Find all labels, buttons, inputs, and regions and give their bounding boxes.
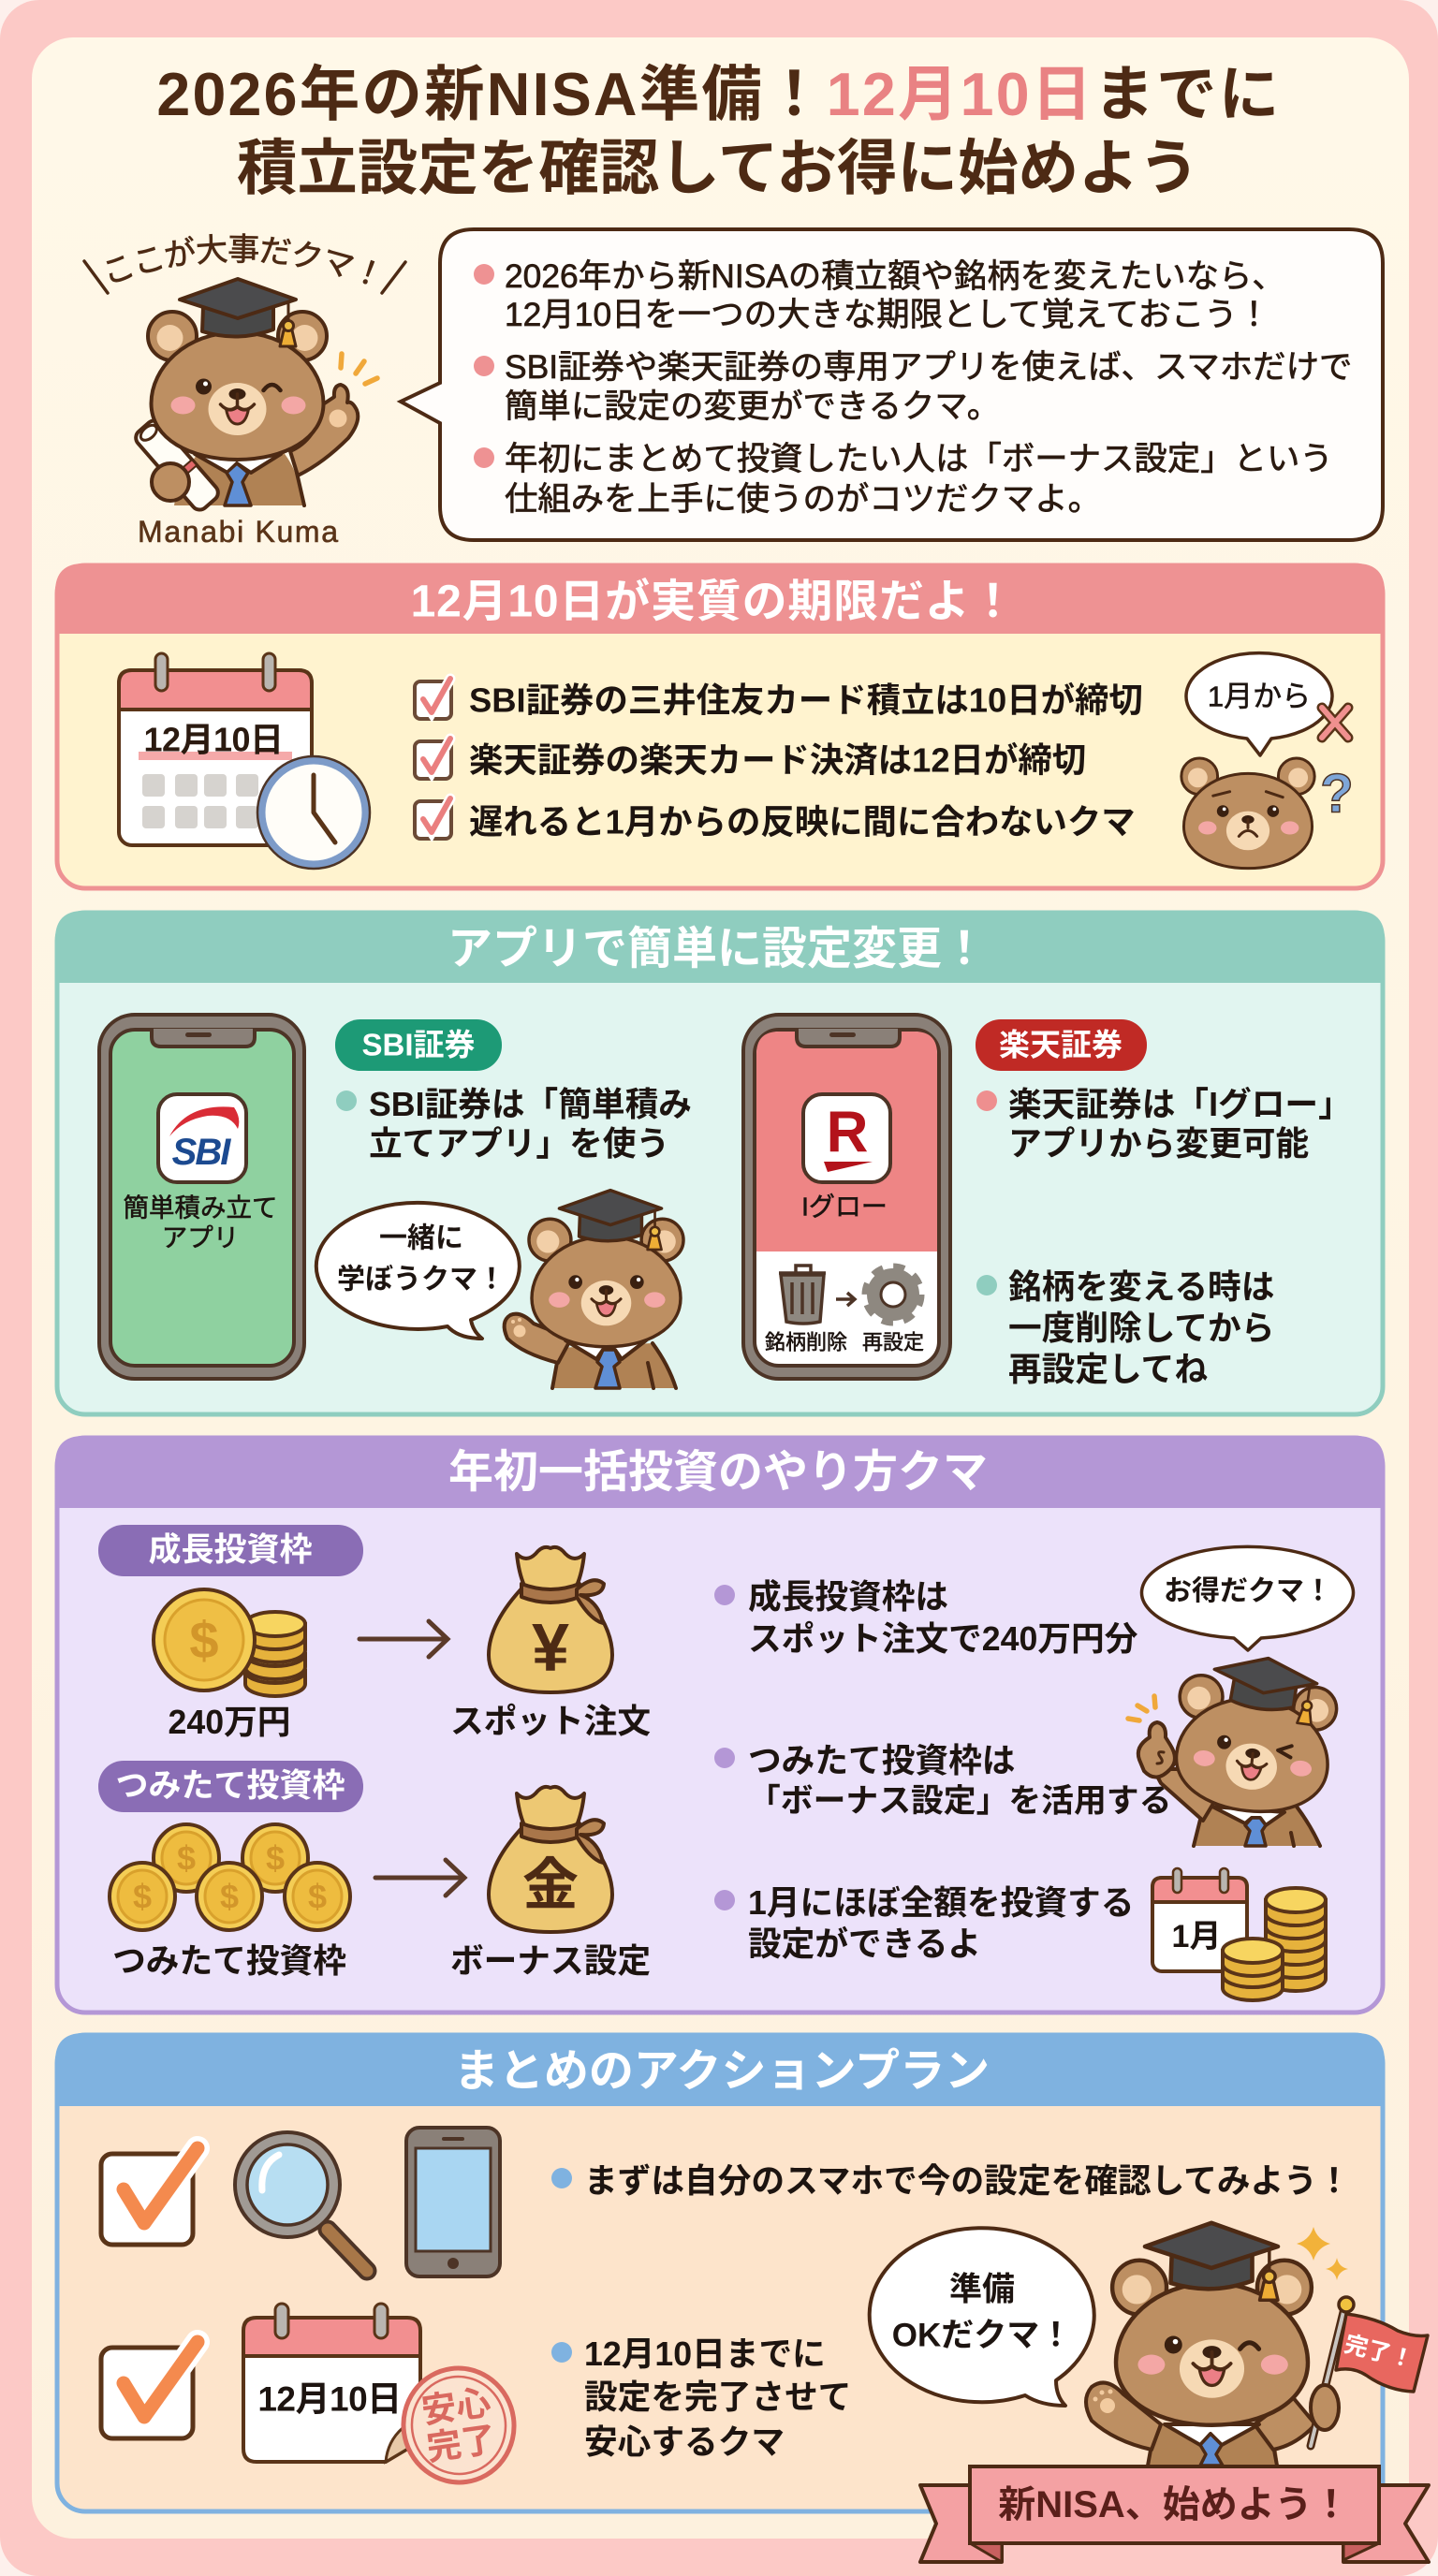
- panel: app settings: [55, 911, 1385, 1414]
- text: iGrow: アプリから変更可能: [1008, 1125, 1309, 1163]
- icon: coin stack: $: [189, 1610, 219, 1670]
- bear body: [132, 385, 358, 513]
- text: re-set: 一度削除してから: [1008, 1310, 1274, 1347]
- text: re-set: 銘柄を変える時は: [1008, 1268, 1274, 1306]
- panel: December 10 deadline: [55, 564, 1385, 888]
- icon: calendar Dec 10: [243, 2304, 420, 2462]
- heading: 12月10日が実質の期限だよ！: [411, 577, 1016, 627]
- caption: ここが大事だクマ: ここが大事だクマ！: [107, 233, 374, 285]
- arrow: [360, 1621, 448, 1657]
- icon: trash: [779, 1266, 826, 1324]
- SBI phone: アプリ: [162, 1222, 239, 1252]
- pill: tsumitate frame: [98, 1761, 363, 1812]
- pill: Rakuten: 楽天証券: [999, 1028, 1123, 1061]
- waving bear: [505, 1191, 683, 1388]
- bullet 1: 2026年から新NISAの積立額や銘柄を変えたいなら、: [505, 257, 1285, 295]
- Rakuten phone: Iグロー: [801, 1193, 888, 1221]
- question mark: ?: [1320, 764, 1354, 824]
- clock: [257, 756, 370, 869]
- checklist: SBI証券の三井住友カード積立は10日が締切: [469, 681, 1143, 719]
- pill: SBI: SBI証券: [361, 1028, 476, 1061]
- panel: lump sum at start of year: ボーナス設定: [450, 1942, 651, 1980]
- arrow: [375, 1860, 464, 1895]
- bullet 2: [474, 348, 1352, 425]
- text: SBI app: SBI証券は「簡単積み: [369, 1086, 692, 1123]
- checklist: [415, 679, 1143, 841]
- stamp: peace of mind: [396, 2361, 521, 2490]
- checklist: 楽天証券の楽天カード決済は12日が締切: [469, 741, 1086, 779]
- pill: growth frame: 成長投資枠: [148, 1531, 313, 1569]
- title: 2026年の新NISA準備！12月10日までに: [156, 61, 1282, 128]
- title: [156, 61, 1282, 202]
- icon: five coins: $: [133, 1878, 152, 1915]
- text: complete by deadline: 安心するクマ: [584, 2423, 785, 2461]
- icon: five coins: $: [308, 1878, 327, 1915]
- heading: まとめのアクションプラン: [454, 2046, 990, 2097]
- icon: January calendar with coins: [1152, 1868, 1326, 2000]
- panel: action plan: [55, 2033, 1428, 2511]
- icon: gold bag: 金: [522, 1853, 579, 1917]
- bubble: learn together: 学ぼうクマ！: [337, 1264, 506, 1295]
- bubble: ready: [870, 2228, 1094, 2406]
- bubble: learn together: [316, 1203, 520, 1339]
- ribbon banner: [920, 2466, 1429, 2562]
- bubble: from January: 1月から: [1208, 680, 1311, 713]
- bubble: ready: OKだクマ！: [892, 2318, 1072, 2353]
- icon: five coins: $: [220, 1878, 239, 1915]
- scroll: [132, 417, 222, 513]
- icon: smartphone: [406, 2128, 500, 2276]
- text: tsumitate: [714, 1742, 1171, 1820]
- heading: 年初一括投資のやり方クマ: [448, 1447, 988, 1498]
- bullet 3: 仕組みを上手に使うのがコツだクマよ。: [505, 480, 1101, 518]
- bubble: good deal: [1142, 1546, 1354, 1650]
- text: complete by deadline: 12月10日までに: [584, 2335, 826, 2373]
- bullet 1: 12月10日を一つの大きな期限として覚えておこう！: [505, 296, 1270, 333]
- icon: January calendar with coins: 1月: [1172, 1919, 1221, 1954]
- icon: five coins: [110, 1824, 350, 1930]
- pill: growth frame: [98, 1525, 363, 1576]
- icon: coin stack: [154, 1589, 305, 1696]
- checklist: 遅れると1月からの反映に間に合わないクマ: [469, 803, 1136, 841]
- text: SBI app: [336, 1086, 692, 1163]
- icon: yen bag: [489, 1547, 612, 1692]
- text: re-set: [976, 1268, 1274, 1388]
- text: growth: [714, 1578, 1138, 1658]
- bear head: [148, 312, 327, 460]
- icon: five coins: $: [266, 1838, 285, 1878]
- thumbs-up bear: [1128, 1651, 1339, 1846]
- bear hat: [180, 279, 296, 346]
- icon: five coins: $: [177, 1838, 196, 1878]
- flag: 完了！: [1342, 2331, 1416, 2374]
- icon: magnifier: [235, 2132, 367, 2271]
- text: iGrow: 楽天証券は「Iグロー」: [1008, 1086, 1352, 1123]
- arrow: [836, 1293, 855, 1306]
- Rakuten phone: 再設定: [862, 1331, 924, 1354]
- bullet 2: 簡単に設定の変更ができるクマ。: [505, 388, 1000, 425]
- text: tsumitate: つみたて投資枠は: [748, 1742, 1015, 1779]
- text: re-set: 再設定してね: [1008, 1351, 1208, 1388]
- speech bubble: summary: [401, 229, 1383, 540]
- icon: yen bag: ¥: [532, 1611, 569, 1686]
- text: SBI app: 立てアプリ」を使う: [369, 1125, 669, 1163]
- stamp: peace of mind: 完了: [424, 2420, 498, 2467]
- heading: アプリで簡単に設定変更！: [448, 925, 987, 973]
- name: Manabi Kuma: [138, 515, 338, 549]
- icon: check 1: [101, 2148, 198, 2245]
- bullet 2: SBI証券や楽天証券の専用アプリを使えば、スマホだけで: [505, 348, 1352, 386]
- Rakuten phone: [743, 1015, 950, 1379]
- pill: SBI: [335, 1019, 502, 1071]
- ribbon banner: 新NISA、始めよう！: [998, 2484, 1350, 2525]
- icon: calendar with clock: 12月10日: [143, 721, 284, 758]
- text: growth: スポット注文で240万円分: [748, 1620, 1138, 1658]
- SBI app icon: SBI: [172, 1132, 231, 1173]
- celebrating bear with flag: [1086, 2223, 1428, 2481]
- icon: check 2: [101, 2342, 198, 2438]
- text: january: 設定ができるよ: [748, 1925, 981, 1963]
- title: 積立設定を確認してお得に始めよう: [237, 135, 1199, 202]
- stamp: peace of mind: 安心: [419, 2383, 493, 2431]
- panel: lump sum at start of year: つみたて投資枠: [112, 1942, 346, 1980]
- SBI app icon: [158, 1094, 246, 1182]
- text: tsumitate: 「ボーナス設定」を活用する: [748, 1782, 1171, 1820]
- icon: gear: [868, 1269, 918, 1320]
- bubble: ready: 準備: [949, 2271, 1015, 2308]
- panel: lump sum at start of year: [55, 1436, 1385, 2012]
- worried bear: [1181, 758, 1314, 869]
- Rakuten app icon: [803, 1094, 890, 1182]
- sparkle marks: [341, 354, 377, 384]
- bullet 3: [474, 440, 1333, 518]
- text: check settings: まずは自分のスマホで今の設定を確認してみよう！: [584, 2162, 1351, 2200]
- text: growth: 成長投資枠は: [748, 1578, 948, 1616]
- icon: calendar Dec 10: 12月10日: [257, 2379, 402, 2419]
- sparkles: [1297, 2227, 1348, 2280]
- bubble: learn together: 一緒に: [379, 1222, 463, 1254]
- Rakuten phone: 銘柄削除: [765, 1331, 847, 1354]
- bullet 3: 年初にまとめて投資したい人は「ボーナス設定」という: [505, 440, 1333, 477]
- text: complete by deadline: 設定を完了させて: [584, 2378, 852, 2416]
- bubble: good deal: お得だクマ！: [1164, 1576, 1332, 1606]
- mascot: Manabi Kuma: [82, 233, 407, 549]
- text: january: [714, 1884, 1134, 1963]
- text: iGrow: [976, 1086, 1352, 1163]
- bullet 1: [474, 257, 1285, 333]
- bear hand: [152, 463, 189, 501]
- pill: Rakuten: [976, 1019, 1147, 1071]
- icon: calendar with clock: [119, 653, 370, 869]
- bubble: from January: [1186, 653, 1348, 755]
- flag: [1311, 2297, 1428, 2446]
- icon: gold bag: [489, 1787, 612, 1932]
- SBI phone: [99, 1015, 304, 1379]
- panel: lump sum at start of year: 240万円: [169, 1704, 290, 1741]
- text: complete by deadline: [551, 2335, 852, 2461]
- text: january: 1月にほぼ全額を投資する: [748, 1884, 1134, 1922]
- Rakuten app icon: R: [827, 1101, 868, 1164]
- panel: lump sum at start of year: スポット注文: [450, 1703, 651, 1740]
- SBI phone: 簡単積み立て: [124, 1193, 277, 1222]
- pill: tsumitate frame: つみたて投資枠: [115, 1767, 345, 1805]
